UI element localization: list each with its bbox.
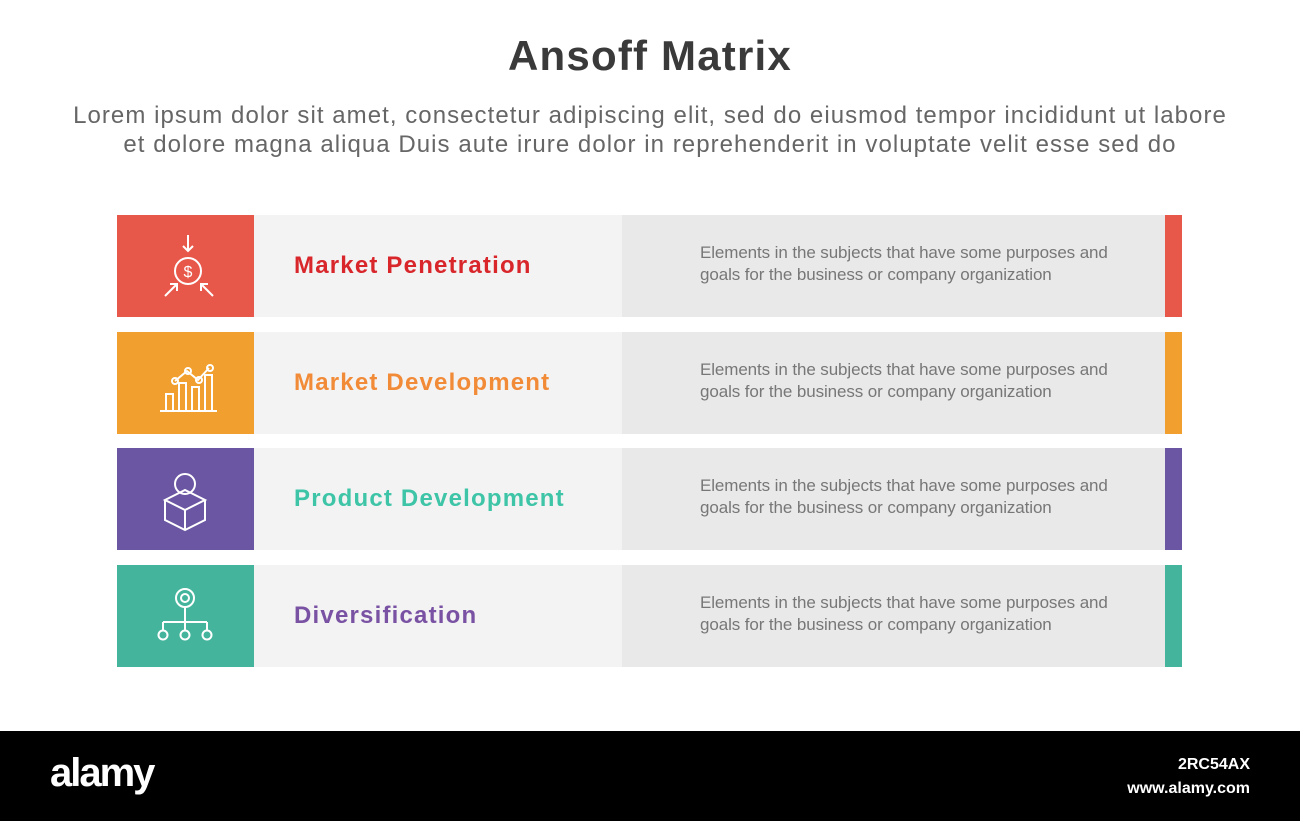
icon: box gear bbox=[117, 448, 254, 550]
image id: 2RC54AX bbox=[1178, 756, 1250, 773]
title: Ansoff Matrix bbox=[508, 32, 792, 79]
heading: Market Penetration bbox=[294, 252, 532, 279]
icon: dollar bbox=[117, 215, 254, 317]
heading: Market Development bbox=[294, 369, 550, 396]
subtitle bbox=[73, 102, 1227, 158]
description: goals for the business or company organization bbox=[700, 615, 1052, 634]
description: goals for the business or company organization bbox=[700, 382, 1052, 401]
icon: dollar: $ bbox=[184, 264, 193, 281]
row: product development bbox=[117, 448, 1182, 550]
description: Elements in the subjects that have some purposes and bbox=[700, 360, 1108, 379]
row: market development bbox=[117, 332, 1182, 434]
description: Elements in the subjects that have some purposes and bbox=[700, 243, 1108, 262]
description: Elements in the subjects that have some purposes and bbox=[700, 593, 1108, 612]
footer bar bbox=[0, 731, 1300, 821]
row: market penetration bbox=[117, 215, 1182, 317]
icon: chart bbox=[117, 332, 254, 434]
heading: Diversification bbox=[294, 602, 477, 629]
description: Elements in the subjects that have some purposes and bbox=[700, 476, 1108, 495]
description bbox=[700, 243, 1108, 284]
image id bbox=[1127, 756, 1250, 797]
subtitle: Lorem ipsum dolor sit amet, consectetur adipiscing elit, sed do eiusmod tempor incididunt ut labore bbox=[73, 102, 1227, 129]
description bbox=[700, 593, 1108, 634]
image id: www.alamy.com bbox=[1127, 780, 1250, 797]
description: goals for the business or company organization bbox=[700, 265, 1052, 284]
description: goals for the business or company organization bbox=[700, 498, 1052, 517]
icon: hierarchy bbox=[117, 565, 254, 667]
description bbox=[700, 360, 1108, 401]
logo: alamy bbox=[50, 751, 153, 795]
heading: Product Development bbox=[294, 485, 565, 512]
row: diversification bbox=[117, 565, 1182, 667]
subtitle: et dolore magna aliqua Duis aute irure dolor in reprehenderit in voluptate velit esse sed do bbox=[123, 131, 1177, 158]
description bbox=[700, 476, 1108, 517]
